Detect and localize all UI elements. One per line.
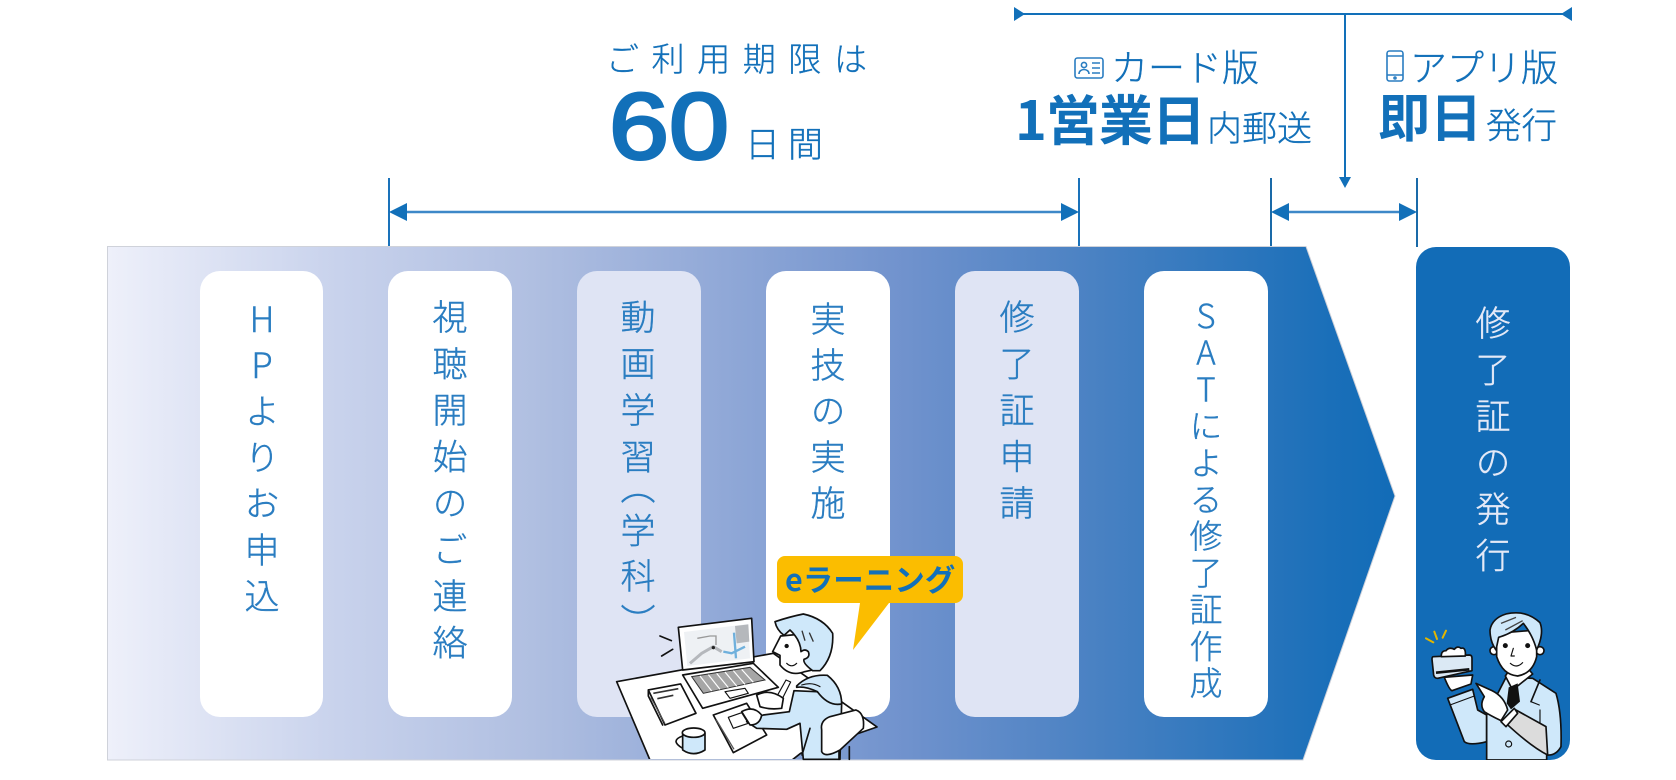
hair <box>1490 613 1542 650</box>
step: viewing start notice <box>388 271 512 717</box>
heading: usage period: ご利用期限は <box>606 33 880 81</box>
app version label: 即日 <box>1378 77 1482 152</box>
step: certificate creation by SAT <box>1144 271 1268 717</box>
desk <box>617 653 877 762</box>
illustration: man with card <box>1426 613 1561 760</box>
step: HP application <box>200 271 323 717</box>
illustration: learner at desk <box>617 614 877 762</box>
heading: usage period: 日間 <box>745 117 831 168</box>
hands and pen <box>777 680 791 700</box>
step: certificate creation by SAT: SATによる修了証作成 <box>1182 299 1230 703</box>
motion marks <box>660 636 673 656</box>
app version label <box>1378 38 1558 152</box>
chair <box>839 747 849 759</box>
card <box>1432 655 1472 678</box>
step: video study: 科 <box>612 558 664 604</box>
step: certificate application: 修了証申請 <box>992 299 1042 532</box>
process arrow banner <box>108 246 1395 760</box>
step: video study <box>577 271 701 717</box>
notebook <box>713 703 767 753</box>
step: viewing start notice: 視聴開始のご連絡 <box>424 299 476 671</box>
hood <box>797 675 842 704</box>
panel: certificate issue: 修了証の発行 <box>1468 305 1518 584</box>
jacket <box>1487 677 1561 760</box>
callout: e-learning <box>777 556 963 650</box>
step: practical: 実技の実施 <box>802 301 854 531</box>
step: video study: ） <box>612 603 664 650</box>
body <box>747 691 842 759</box>
app version label: 発行 <box>1486 98 1557 149</box>
card version label: 内郵送 <box>1207 101 1312 152</box>
step: video study: 動画学習 <box>612 299 664 485</box>
step: video study: （ <box>612 469 664 516</box>
card version label: 1営業日 <box>1015 77 1205 156</box>
app version label: アプリ版 <box>1410 38 1558 92</box>
person <box>742 614 864 759</box>
top bracket arrow <box>1014 7 1572 188</box>
card version label: カード版 <box>1111 38 1259 92</box>
sleeve <box>1506 710 1548 755</box>
step: video study: 学 <box>612 512 664 558</box>
left arm <box>1448 689 1487 744</box>
span arrow: issue time <box>1271 178 1417 247</box>
card version label <box>1015 38 1312 156</box>
icon: smartphone <box>1387 51 1403 81</box>
sparkle marks <box>1426 631 1446 642</box>
head <box>1490 647 1498 655</box>
panel: certificate issue <box>1416 247 1570 760</box>
shirt and tie <box>1505 670 1533 690</box>
icon: ID card <box>1075 58 1103 78</box>
step: certificate application <box>955 271 1079 717</box>
desk items <box>617 618 877 762</box>
step: practical <box>766 271 890 717</box>
pointing hand <box>1476 683 1508 721</box>
card fingers <box>1441 647 1465 657</box>
heading: usage period: 60 <box>609 74 729 178</box>
callout: e-learning: eラーニング <box>785 556 955 600</box>
card hand <box>1444 675 1473 691</box>
book <box>648 684 696 725</box>
heading: usage period <box>606 33 880 178</box>
head <box>773 633 820 673</box>
hair <box>775 614 833 671</box>
span arrow: 60 days <box>389 178 1079 247</box>
mug <box>683 733 705 754</box>
laptop <box>678 618 778 708</box>
step: HP application: HPよりお申込 <box>236 301 288 624</box>
